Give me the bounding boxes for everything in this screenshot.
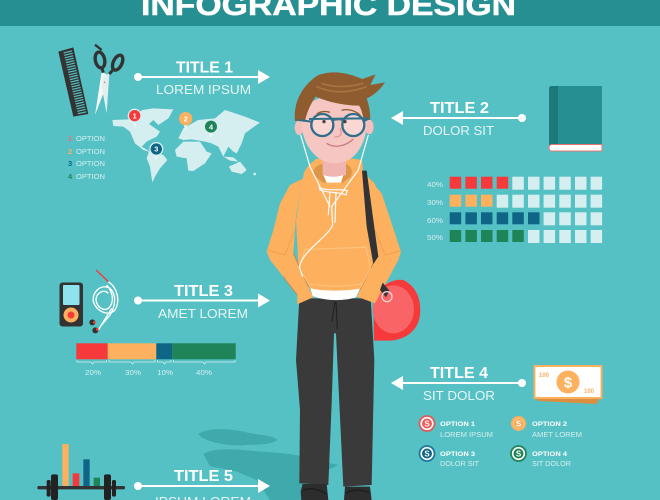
hoodie body (296, 159, 387, 291)
map legend: 2 (68, 147, 72, 156)
earphone cable (299, 135, 368, 277)
shoes (301, 484, 372, 500)
face (301, 96, 368, 163)
stacked bar chart: 30% (125, 370, 141, 377)
torso group (267, 135, 401, 304)
map pins: 1 (133, 111, 137, 120)
option 4: S (516, 450, 522, 458)
icon: banknotes: $ (564, 374, 573, 392)
option 2 (511, 416, 582, 439)
percentage grid chart: 40% (427, 182, 443, 189)
option 3: DOLOR SIT (440, 461, 480, 468)
heading: title 5 (155, 468, 251, 500)
heading: title 1 (156, 60, 251, 97)
arrow: title 4 (391, 376, 526, 390)
heading: title 2 (423, 100, 494, 138)
option 4 (511, 446, 571, 468)
heading: title 5: TITLE 5 (174, 468, 233, 485)
map legend (68, 134, 105, 181)
options list (420, 416, 582, 468)
heading: title 4 (423, 365, 495, 403)
heading: title 1: LOREM IPSUM (156, 82, 251, 97)
map legend: 4 (68, 172, 73, 181)
bag (373, 280, 420, 341)
percentage grid chart (427, 177, 602, 243)
map pins: 3 (154, 145, 158, 154)
heading: title 2: DOLOR SIT (423, 123, 494, 138)
arrow: title 5 (134, 479, 270, 493)
hair (295, 72, 385, 121)
option 1: OPTION 1 (440, 421, 475, 428)
glasses (298, 114, 369, 136)
option 1: LOREM IPSUM (440, 432, 493, 439)
map legend: OPTION (76, 161, 105, 168)
icon: music player (60, 282, 83, 326)
option 4: SIT DOLOR (532, 461, 571, 468)
heading: title 1: TITLE 1 (176, 60, 233, 76)
icon: banknotes (534, 366, 602, 404)
icon: earphones (89, 270, 118, 333)
world map (112, 108, 260, 182)
icon: banknotes: 100 (584, 389, 595, 395)
ears (295, 120, 374, 135)
option 2: AMET LOREM (532, 432, 582, 439)
heading: title 3 (158, 283, 248, 321)
option 2: S (516, 420, 522, 428)
arrow: title 3 (134, 294, 270, 308)
map legend: OPTION (76, 174, 105, 181)
percentage grid chart: 60% (427, 218, 443, 225)
heading: title 3: AMET LOREM (158, 306, 248, 321)
stacked bar chart: 20% (85, 370, 101, 377)
option 3: S (424, 450, 430, 458)
option 2: OPTION 2 (532, 421, 567, 428)
icon: comb (58, 47, 88, 117)
icon: banknotes: 100 (539, 373, 550, 379)
stacked bar chart (76, 343, 236, 377)
heading: title 4: TITLE 4 (430, 365, 488, 382)
pocket (299, 247, 371, 288)
percentage grid chart: 50% (427, 235, 443, 242)
option 3: OPTION 3 (440, 451, 475, 458)
map pins (128, 109, 217, 161)
ground shadow (198, 429, 338, 500)
option 1: S (424, 420, 430, 428)
hood (303, 159, 363, 192)
title banner (0, 0, 660, 26)
eyes, brows, nose, mouth (317, 110, 360, 146)
percentage grid chart: 30% (427, 200, 443, 207)
shirt at collar (323, 175, 343, 183)
icon: barbell with bars (37, 444, 125, 500)
neck (323, 155, 346, 177)
heading: title 2: TITLE 2 (430, 100, 489, 117)
stacked bar chart: 40% (196, 370, 212, 377)
strap (362, 171, 378, 264)
map legend: OPTION (76, 149, 105, 156)
icon: book (549, 86, 602, 151)
trousers (296, 298, 374, 487)
stacked bar chart: 10% (157, 370, 173, 377)
map legend: 3 (68, 159, 72, 168)
map legend: 1 (68, 134, 72, 143)
option 4: OPTION 4 (532, 451, 567, 458)
white t-shirt hem (309, 285, 362, 300)
option 1 (420, 416, 493, 439)
map pins: 2 (184, 114, 188, 123)
heading: title 3: TITLE 3 (174, 283, 233, 300)
icon: scissors (94, 45, 125, 115)
map legend: OPTION (76, 136, 105, 143)
figure: student (267, 72, 420, 500)
arrow: title 1 (134, 70, 270, 84)
heading: title 4: SIT DOLOR (423, 388, 495, 403)
map pins: 4 (209, 122, 214, 131)
right arm (357, 180, 401, 303)
arrow: title 2 (391, 111, 526, 125)
left arm (267, 178, 313, 304)
head (295, 72, 385, 163)
option 3 (420, 446, 480, 468)
